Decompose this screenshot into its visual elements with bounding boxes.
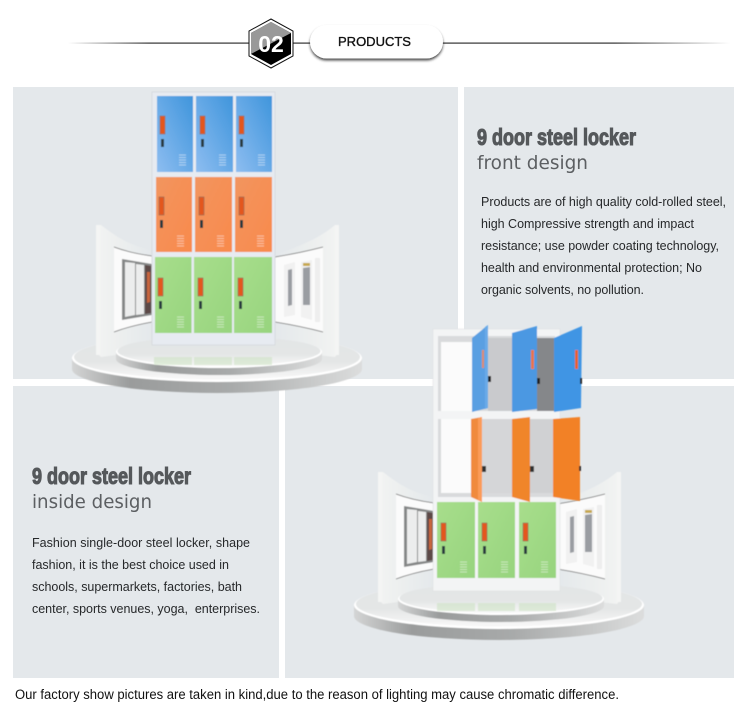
- green doors: [437, 502, 556, 578]
- text: front design description: [481, 195, 726, 297]
- products heading pill: [310, 25, 443, 58]
- panel: bottom right: [285, 386, 734, 678]
- heading: inside design: [32, 463, 191, 513]
- front locker: [152, 92, 275, 365]
- text: inside design description: Fashion single-door steel locker, shape: [32, 536, 250, 550]
- footer note: Our factory show pictures are taken in kind,due to the reason of lighting may cause chromatic difference.: [15, 687, 619, 702]
- heading: front design: front design: [477, 152, 588, 174]
- text: front design description: Products are of high quality cold-rolled steel,: [481, 195, 726, 209]
- text: inside design description: fashion, it is the best choice used in: [32, 558, 229, 572]
- upper compartments: [438, 336, 555, 411]
- panel: top left: [13, 87, 458, 379]
- text: front design description: high Compressive strength and impact: [481, 217, 695, 231]
- text: inside design description: center, sports venues, yoga, enterprises.: [32, 602, 260, 616]
- heading: front design: [477, 124, 636, 174]
- blue doors: [157, 96, 272, 172]
- green reflection: [154, 357, 272, 365]
- icon: number 02 hexagon badge: [249, 19, 293, 68]
- green doors: [155, 257, 272, 333]
- inside locker stage: [354, 472, 644, 640]
- header rule: [68, 42, 730, 44]
- orange doors: [156, 177, 272, 252]
- inside locker: [433, 325, 582, 611]
- products heading pill: PRODUCTS: [338, 35, 411, 49]
- text: inside design description: schools, supermarkets, factories, bath: [32, 580, 242, 594]
- text: front design description: organic solvents, no pollution.: [481, 283, 644, 297]
- text: front design description: resistance; use powder coating technology,: [481, 239, 719, 253]
- green reflection: [437, 603, 556, 611]
- middle compartments: [438, 419, 555, 497]
- heading: inside design: inside design: [32, 491, 152, 513]
- text: front design description: health and environmental protection; No: [481, 261, 702, 275]
- icon: number 02 hexagon badge: 02: [258, 31, 284, 57]
- heading: inside design: 9 door steel locker: [32, 463, 191, 489]
- panel: top right: [464, 87, 734, 379]
- open orange doors: [471, 417, 581, 502]
- panel: bottom left: [13, 386, 279, 678]
- open blue doors: [472, 325, 582, 412]
- front locker stage: [72, 225, 362, 393]
- heading: front design: 9 door steel locker: [477, 124, 636, 150]
- text: inside design description: [32, 536, 260, 616]
